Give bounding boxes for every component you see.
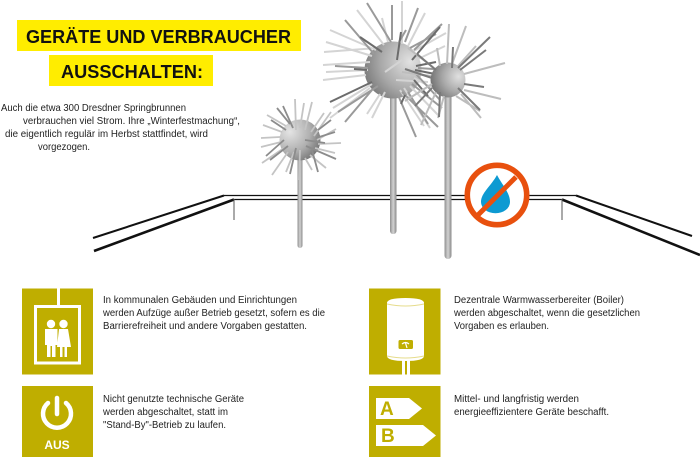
text: boiler: Dezentrale Warmwasserbereiter (Boiler) bbox=[454, 295, 624, 306]
text: standby bbox=[102, 394, 245, 431]
panel: boiler bbox=[369, 288, 640, 375]
icon: no water sign bbox=[467, 165, 527, 225]
fountain: right bbox=[402, 24, 505, 259]
intro text: verbrauchen viel Strom. Ihre „Winterfestmachung“, bbox=[23, 116, 240, 127]
text: boiler: werden abgeschaltet, wenn die gesetzlichen bbox=[453, 308, 640, 319]
panel: standby bbox=[22, 386, 245, 457]
text: elevators: In kommunalen Gebäuden und Einrichtungen bbox=[103, 295, 297, 306]
intro text bbox=[1, 103, 240, 153]
icon: energy labels bbox=[369, 386, 440, 457]
icon: power off: AUS bbox=[44, 438, 70, 452]
text: boiler bbox=[453, 295, 640, 332]
icon: boiler bbox=[369, 288, 440, 375]
fountain: large bbox=[323, 1, 448, 234]
text: efficient devices: energieeffizientere Geräte beschafft. bbox=[454, 407, 609, 418]
panel: elevators bbox=[22, 288, 326, 374]
panel: efficient devices bbox=[369, 386, 609, 457]
text: standby: werden abgeschaltet, statt im bbox=[102, 407, 228, 418]
icon: power off bbox=[22, 386, 93, 457]
icon: energy labels: B bbox=[381, 426, 395, 447]
intro text: vorgezogen. bbox=[38, 142, 90, 153]
title: GERÄTE UND VERBRAUCHER bbox=[26, 26, 291, 47]
icon: energy labels: A bbox=[380, 399, 394, 420]
text: standby: Nicht genutzte technische Geräte bbox=[103, 394, 245, 405]
intro text: die eigentlich regulär im Herbst stattfindet, wird bbox=[5, 129, 208, 140]
fountain: small bbox=[261, 99, 341, 248]
title: AUSSCHALTEN: bbox=[61, 61, 203, 82]
text: elevators: Barrierefreiheit und andere Vorgaben gestatten. bbox=[103, 321, 307, 332]
text: elevators: werden Aufzüge außer Betrieb gesetzt, sofern es die bbox=[102, 308, 326, 319]
text: boiler: Vorgaben es erlauben. bbox=[454, 321, 549, 332]
title bbox=[17, 20, 301, 86]
text: efficient devices: Mittel- und langfristig werden bbox=[454, 394, 579, 405]
text: elevators bbox=[102, 295, 326, 332]
railing lines bbox=[93, 196, 700, 255]
text: standby: "Stand-By"-Betrieb zu laufen. bbox=[103, 420, 226, 431]
icon: elevator bbox=[22, 288, 93, 374]
intro text: Auch die etwa 300 Dresdner Springbrunnen bbox=[1, 103, 186, 114]
text: efficient devices bbox=[454, 394, 609, 418]
